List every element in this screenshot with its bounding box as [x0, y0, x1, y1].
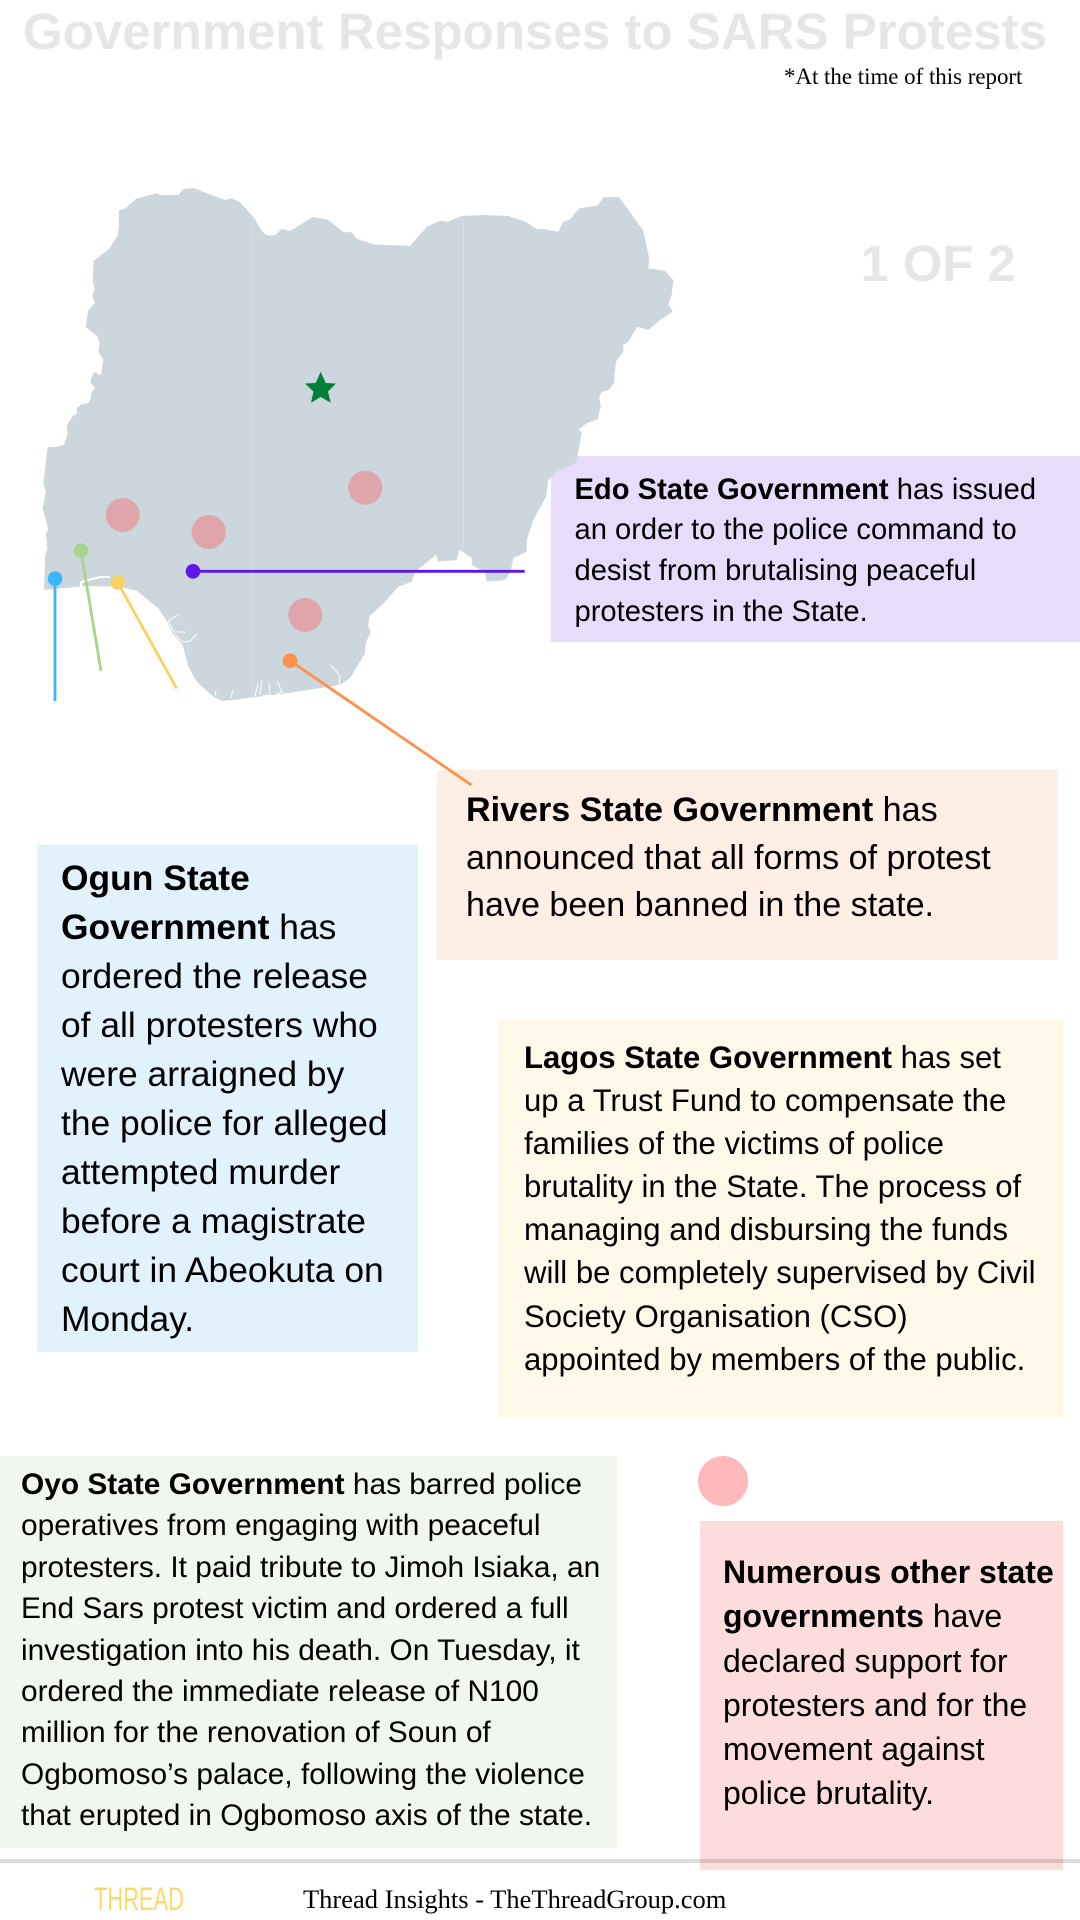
text: Oyo State response: protesters. It paid tribute to Jimoh Isiaka, an — [21, 1551, 600, 1584]
text: Edo State response: an order to the police command to — [574, 514, 1017, 546]
pin: Oyo — [74, 543, 101, 671]
text: Ogun State response: the police for alleged — [61, 1103, 388, 1143]
text: Lagos State response: appointed by members of the public. — [524, 1342, 1025, 1377]
text: Oyo State response: Ogbomoso’s palace, following the violence — [21, 1758, 585, 1791]
text: Lagos State response: Lagos State Government has set — [524, 1040, 1001, 1075]
title: Government Responses to SARS Protests — [23, 3, 1047, 60]
page indicator: 1 OF 2 — [860, 235, 1016, 292]
text: Ogun State response: before a magistrate — [61, 1201, 366, 1241]
text: Edo State response — [574, 474, 1036, 628]
text: Ogun State response: Ogun State — [61, 858, 250, 898]
panel: other state governments — [700, 1521, 1063, 1870]
pin: Edo — [186, 564, 525, 579]
map of Nigeria with markers — [42, 188, 674, 786]
text: Edo State response: protesters in the State. — [574, 596, 868, 628]
text: Edo State response: desist from brutalising peaceful — [574, 555, 976, 587]
pin: Lagos — [110, 575, 177, 688]
text: Lagos State response: will be completely supervised by Civil — [524, 1255, 1036, 1290]
text: Oyo State response: million for the renovation of Soun of — [21, 1716, 491, 1749]
text: Lagos State response — [524, 1040, 1036, 1377]
text: Ogun State response — [61, 858, 388, 1339]
text: Ogun State response: of all protesters who — [61, 1005, 378, 1045]
icon: legend dot for other states — [698, 1456, 748, 1506]
text: Rivers State response: have been banned in the state. — [466, 886, 934, 924]
panel: Edo State — [551, 456, 1080, 642]
text: Oyo State response: that erupted in Ogbomoso axis of the state. — [21, 1799, 592, 1832]
text: Lagos State response: brutality in the State. The process of — [524, 1169, 1021, 1204]
text: Ogun State response: Government has — [61, 907, 336, 947]
text: Ogun State response: ordered the release — [61, 956, 368, 996]
text: Ogun State response: attempted murder — [61, 1152, 340, 1192]
text: Oyo State response: investigation into his death. On Tuesday, it — [21, 1634, 580, 1667]
text: Rivers State response: announced that all forms of protest — [466, 838, 991, 876]
text: Rivers State response — [466, 791, 991, 924]
text: other state governments: Numerous other state — [723, 1554, 1054, 1590]
text: Lagos State response: managing and disbursing the funds — [524, 1212, 1008, 1247]
text: other state governments: governments have — [723, 1598, 1002, 1634]
text: Ogun State response: court in Abeokuta on — [61, 1250, 384, 1290]
text: other state governments: police brutality. — [723, 1775, 934, 1811]
text: Oyo State response: End Sars protest victim and ordered a full — [21, 1592, 569, 1625]
panel: Rivers State — [437, 770, 1058, 960]
text: Ogun State response: Monday. — [61, 1299, 194, 1339]
footer logo text: THREAD — [94, 1881, 183, 1917]
pin: Ogun — [48, 571, 62, 701]
panel: Ogun State — [37, 845, 418, 1352]
icon: capital star — [305, 372, 336, 403]
text: Oyo State response — [21, 1468, 600, 1832]
text: other state governments: declared support for — [723, 1643, 1008, 1679]
text: Oyo State response: ordered the immediate release of N100 — [21, 1675, 539, 1708]
text: Lagos State response: Society Organisation (CSO) — [524, 1299, 908, 1334]
marker: affected states — [106, 471, 382, 632]
panel: Oyo State — [0, 1456, 617, 1848]
text: Oyo State response: operatives from engaging with peaceful — [21, 1509, 541, 1542]
text: other state governments: movement against — [723, 1731, 984, 1767]
text: Edo State response: Edo State Government has issued — [574, 474, 1036, 506]
text: Lagos State response: up a Trust Fund to compensate the — [524, 1083, 1006, 1118]
text: Ogun State response: were arraigned by — [61, 1054, 344, 1094]
text: Lagos State response: families of the victims of police — [524, 1126, 944, 1161]
footer source: Thread Insights - TheThreadGroup.com — [303, 1884, 726, 1914]
text: other state governments: protesters and for the — [723, 1687, 1027, 1723]
report timing note: *At the time of this report — [784, 64, 1022, 89]
footer rule — [0, 1859, 1080, 1862]
panel: Lagos State — [498, 1020, 1063, 1418]
text: Oyo State response: Oyo State Government has barred police — [21, 1468, 582, 1501]
map: Nigeria outline — [43, 188, 673, 701]
text: Rivers State response: Rivers State Government has — [466, 791, 938, 829]
pin: Rivers — [283, 653, 471, 785]
text: other state governments — [723, 1554, 1054, 1811]
